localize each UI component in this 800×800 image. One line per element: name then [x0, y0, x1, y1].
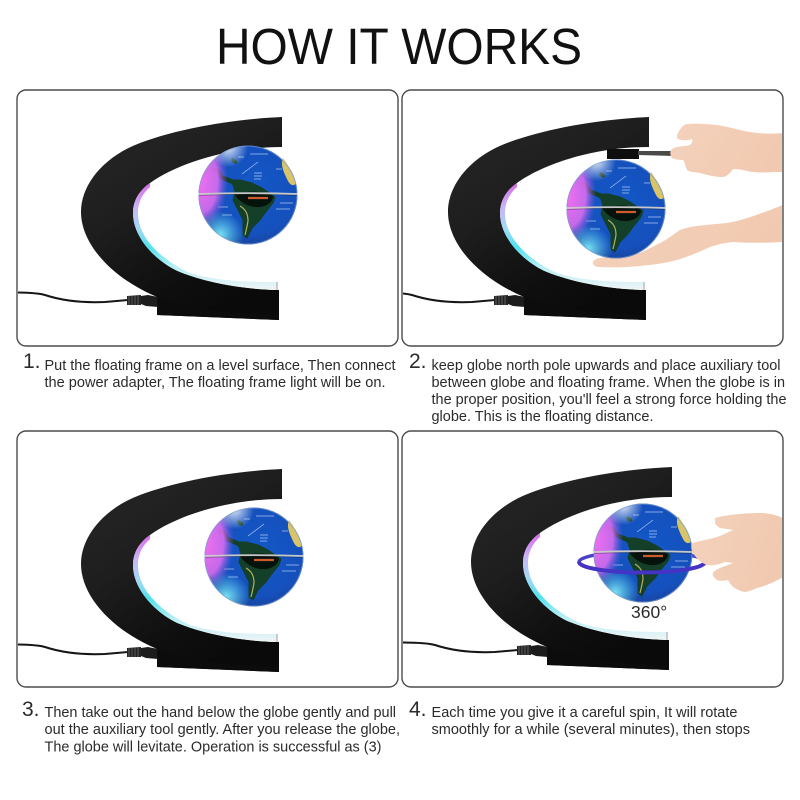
step 4 caption [409, 698, 750, 738]
panel frame 4 [402, 431, 783, 687]
panel: step 1 image [0, 90, 398, 346]
step 4 text [432, 705, 750, 738]
auxiliary tool [607, 149, 674, 159]
globe 2 [566, 160, 666, 258]
step 3 text: Then take out the hand below the globe gently and pull [44, 705, 396, 721]
step 1 text: the power adapter, The floating frame light will be on. [44, 375, 385, 391]
icon: lower hand supporting the globe [593, 205, 783, 267]
levitating stand with cable 1 [0, 117, 282, 320]
step 2 text: between globe and floating frame. When the globe is in [432, 375, 785, 391]
panel: step 2 image [401, 89, 784, 347]
number 3: 3. [22, 698, 40, 721]
panel frame 1 [17, 90, 398, 346]
step 3 caption [22, 698, 400, 756]
icon: upper hand pulling the tool [670, 124, 783, 177]
rotation ring back arc [579, 552, 705, 562]
step 1 caption [23, 350, 396, 391]
step 3 text [44, 705, 400, 756]
panel: step 4 image [370, 431, 783, 687]
number 1: 1. [23, 350, 41, 373]
number 4: 4. [409, 698, 427, 721]
step 2 caption [409, 350, 786, 425]
panel frame 2 [402, 90, 783, 346]
step 2 text: globe. This is the floating distance. [432, 409, 654, 425]
step 1 text: Put the floating frame on a level surface, Then connect [44, 358, 396, 374]
globe 1 [198, 146, 298, 244]
step 3 text: out the auxiliary tool gently. After you release the globe, [44, 722, 400, 738]
step 3 text: The globe will levitate. Operation is successful as (3) [44, 740, 382, 756]
step 2 text: keep globe north pole upwards and place auxiliary tool [432, 358, 780, 374]
step 2 text [432, 358, 786, 425]
globe 3 [204, 508, 304, 606]
globe 4 [594, 504, 692, 602]
rotation ring front arc [579, 562, 705, 572]
levitating stand with cable 4 [403, 467, 672, 670]
number 2: 2. [409, 350, 427, 373]
panel: step 3 image [0, 431, 398, 687]
step 4 text: smoothly for a while (several minutes), then stops [432, 722, 750, 738]
panel frame 3 [17, 431, 398, 687]
levitating stand with cable 3 [0, 469, 282, 672]
step 4 text: Each time you give it a careful spin, It will rotate [432, 705, 738, 721]
icon: hand spinning the globe [691, 513, 783, 592]
title: HOW IT WORKS [216, 18, 582, 75]
step 1 text [44, 358, 396, 391]
step 2 text: the proper position, you'll feel a strong force holding the [432, 392, 786, 408]
levitating stand with cable 2 [403, 117, 649, 320]
360 degree label: 360° [631, 602, 667, 622]
